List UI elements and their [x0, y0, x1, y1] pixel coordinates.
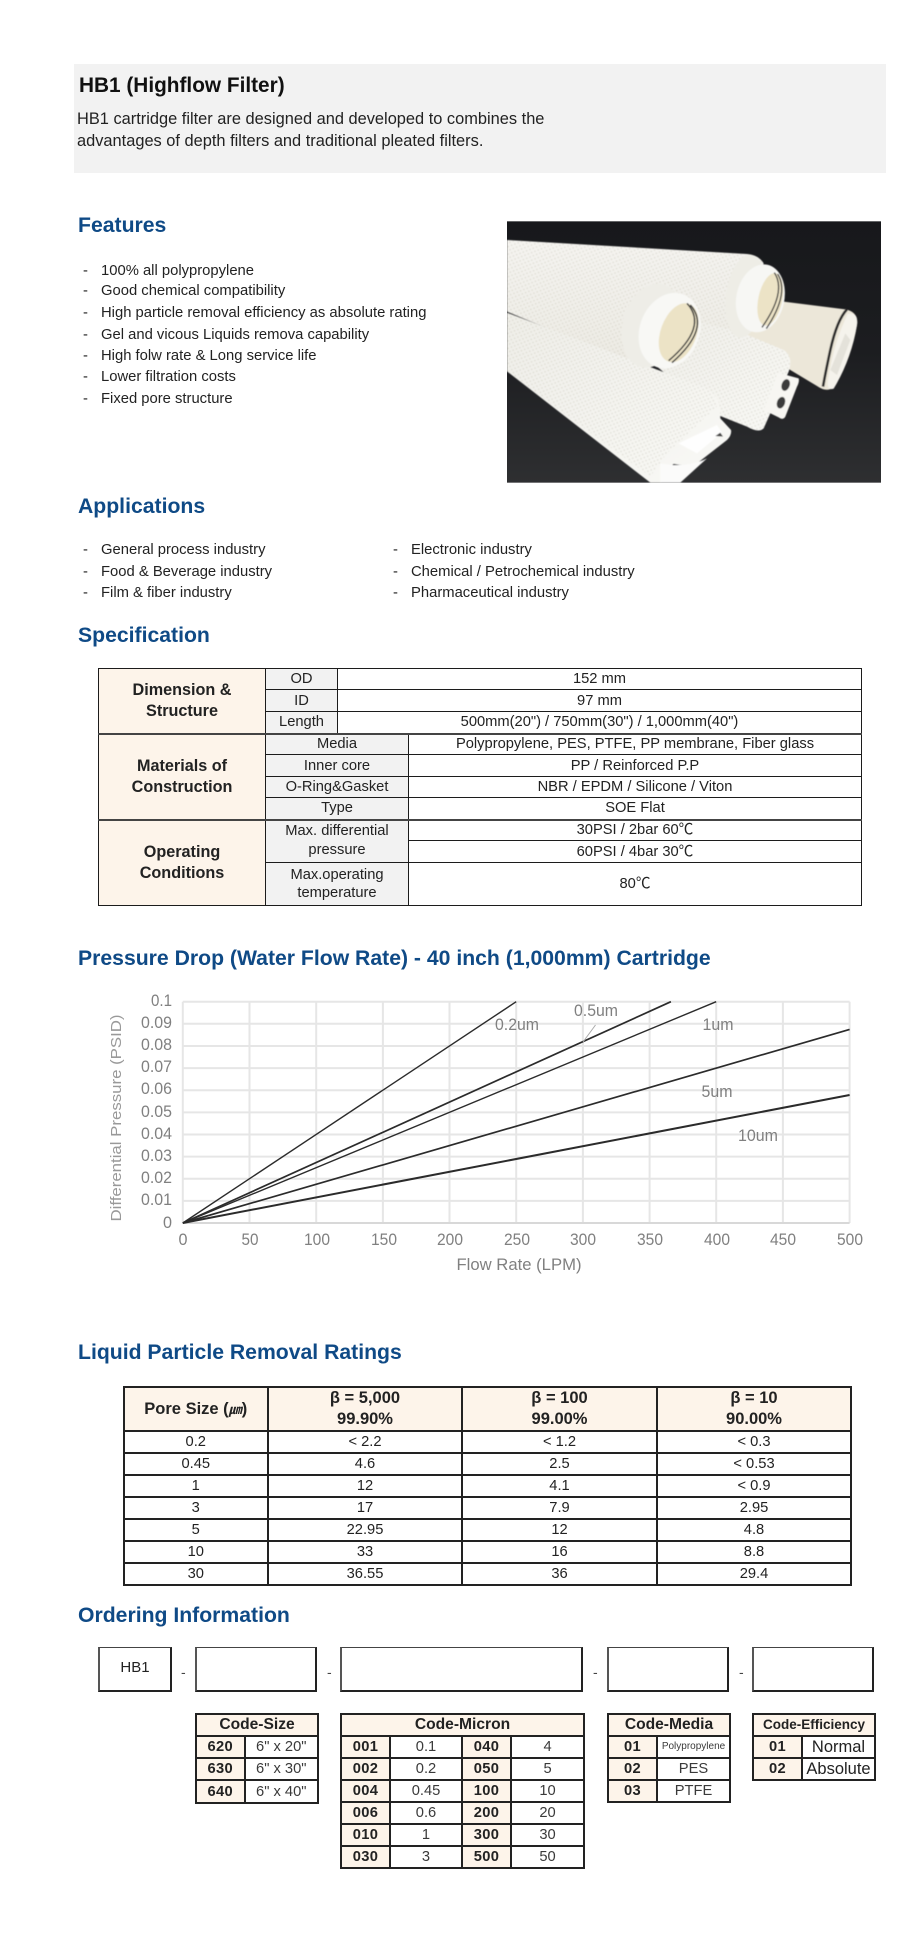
- applications list: Pharmaceutical industry: [411, 585, 569, 601]
- particle removal ratings table: 3: [192, 1500, 200, 1516]
- features list: -: [83, 263, 88, 279]
- order code: media box: [607, 1647, 729, 1692]
- table: Code-Media: 03: [624, 1783, 641, 1799]
- table: Code-Media: [607, 1713, 731, 1803]
- specification table: 152 mm: [573, 671, 626, 687]
- table: Code-Size: Code-Size: [219, 1716, 295, 1733]
- table: Code-Micron: 1: [422, 1827, 430, 1843]
- table: Code-Efficiency: Normal: [812, 1738, 865, 1756]
- table: Code-Micron: 006: [353, 1805, 378, 1821]
- table: Code-Micron: 30: [539, 1827, 556, 1843]
- separator: -: [739, 1664, 744, 1680]
- x axis tick labels: 500: [837, 1230, 863, 1249]
- series lines: [183, 1002, 850, 1223]
- specification table: ID: [294, 692, 309, 708]
- table: Code-Efficiency: Code-Efficiency: [763, 1717, 865, 1732]
- order code: size box: [195, 1647, 317, 1692]
- table: Code-Efficiency: Absolute: [806, 1760, 871, 1778]
- applications list: -: [393, 585, 398, 601]
- applications list: -: [83, 542, 88, 558]
- specification table: Construction: [132, 778, 232, 796]
- table: Code-Micron: 004: [353, 1783, 378, 1799]
- specification table: SOE Flat: [605, 800, 665, 816]
- heading: Liquid Particle Removal Ratings: Liquid Particle Removal Ratings: [78, 1341, 402, 1364]
- y axis tick labels: 0.03: [141, 1146, 172, 1165]
- applications list: -: [393, 564, 398, 580]
- applications list: Food & Beverage industry: [101, 564, 272, 580]
- series labels: [495, 1001, 778, 1145]
- table: Code-Media: 01: [624, 1739, 641, 1755]
- series labels: 1um: [702, 1015, 734, 1034]
- specification table: Materials of: [137, 756, 227, 774]
- x axis tick labels: 200: [437, 1230, 463, 1249]
- particle removal ratings table: 0.45: [181, 1456, 210, 1472]
- table: Code-Micron: 200: [474, 1805, 499, 1821]
- specification table: 97 mm: [577, 692, 622, 708]
- table: Code-Size: 6" x 40": [256, 1784, 306, 1800]
- particle removal ratings table: < 0.9: [737, 1478, 771, 1494]
- particle removal ratings table: 2.5: [549, 1456, 570, 1472]
- x axis tick labels: 150: [371, 1230, 397, 1249]
- y axis tick labels: 0.04: [141, 1124, 172, 1143]
- particle removal ratings table: 16: [551, 1544, 568, 1560]
- separator: -: [593, 1664, 598, 1680]
- x axis tick labels: 0: [178, 1230, 188, 1249]
- table: Code-Media: PES: [679, 1761, 708, 1777]
- order code: HB1 box: [98, 1647, 172, 1692]
- particle removal ratings table: 36.55: [347, 1566, 383, 1582]
- specification table: Conditions: [140, 864, 224, 882]
- features list: -: [83, 348, 88, 364]
- x axis tick labels: 50: [242, 1230, 258, 1249]
- specification table: 80℃: [619, 876, 651, 892]
- specification table: temperature: [297, 885, 377, 901]
- heading: Ordering Information: Ordering Information: [78, 1604, 290, 1627]
- front cartridge: [507, 313, 731, 483]
- separator: -: [327, 1664, 332, 1680]
- table: Code-Media: PTFE: [675, 1783, 712, 1799]
- particle removal ratings table: 8.8: [744, 1544, 764, 1560]
- table: Code-Micron: 040: [474, 1739, 499, 1755]
- particle removal ratings table: β = 5,000: [330, 1389, 400, 1407]
- features list: High folw rate & Long service life: [101, 348, 316, 364]
- features list: High particle removal efficiency as absolute rating: [101, 305, 426, 321]
- table: Code-Micron: 4: [543, 1739, 552, 1755]
- table: Code-Efficiency: [752, 1713, 876, 1781]
- x axis tick labels: 300: [570, 1230, 596, 1249]
- features list: -: [83, 327, 88, 343]
- particle removal ratings table: β = 10: [730, 1389, 778, 1407]
- y axis tick labels: 0.1: [151, 991, 172, 1010]
- y axis tick labels: 0.02: [141, 1168, 172, 1187]
- features list: Fixed pore structure: [101, 391, 233, 407]
- table: Code-Micron: 20: [539, 1805, 556, 1821]
- title: HB1 (Highflow Filter): [79, 74, 285, 97]
- particle removal ratings table: 29.4: [740, 1566, 768, 1582]
- table: Code-Size: 640: [208, 1784, 233, 1800]
- applications list: [83, 542, 635, 601]
- y axis tick labels: 0.07: [141, 1057, 172, 1076]
- table: Code-Micron: 3: [422, 1849, 430, 1865]
- separator: -: [181, 1664, 186, 1680]
- table: Code-Micron: 10: [539, 1783, 556, 1799]
- particle removal ratings table: Pore Size (㎛): [144, 1400, 247, 1418]
- table: Code-Micron: 0.45: [412, 1783, 440, 1799]
- x axis tick labels: [178, 1230, 863, 1249]
- series labels: 0.2um: [495, 1015, 539, 1034]
- table: Code-Size: [195, 1713, 319, 1804]
- specification table: Max.operating: [290, 867, 384, 883]
- specification table: Length: [279, 714, 324, 730]
- specification table: Structure: [146, 702, 218, 720]
- front ring: [612, 277, 691, 374]
- particle removal ratings table: 90.00%: [726, 1410, 782, 1428]
- intro text: HB1 cartridge filter are designed and developed to combines the: [77, 110, 544, 128]
- y axis tick labels: 0.09: [141, 1013, 172, 1032]
- applications list: -: [83, 585, 88, 601]
- particle removal ratings table: < 0.53: [733, 1456, 775, 1472]
- specification table: Type: [321, 800, 353, 816]
- table: Code-Efficiency: 01: [769, 1739, 786, 1755]
- table: Code-Micron: 0.2: [416, 1761, 436, 1777]
- table: Code-Size: 620: [208, 1739, 233, 1755]
- heading: Applications: Applications: [78, 495, 205, 518]
- features list: -: [83, 391, 88, 407]
- order code: efficiency box: [752, 1647, 874, 1692]
- features list: Good chemical compatibility: [101, 283, 285, 299]
- specification table: 30PSI / 2bar 60℃: [577, 822, 693, 838]
- applications list: Chemical / Petrochemical industry: [411, 564, 635, 580]
- x axis tick labels: 100: [304, 1230, 330, 1249]
- particle removal ratings table: 12: [551, 1522, 568, 1538]
- heading: Pressure Drop: Pressure Drop (Water Flow Rate) - 40 inch (1,000mm) Cartridge: [78, 947, 711, 970]
- particle removal ratings table: [123, 1386, 852, 1586]
- particle removal ratings table: 4.6: [355, 1456, 375, 1472]
- particle removal ratings table: < 2.2: [348, 1434, 382, 1450]
- table: Code-Micron: 5: [543, 1761, 552, 1777]
- specification table: OD: [290, 671, 313, 687]
- specification table: pressure: [308, 842, 366, 858]
- applications list: Film & fiber industry: [101, 585, 232, 601]
- table: Code-Micron: 002: [353, 1761, 378, 1777]
- particle removal ratings table: 4.8: [744, 1522, 764, 1538]
- y axis tick labels: 0.05: [141, 1102, 172, 1121]
- intro text: [77, 110, 544, 150]
- particle removal ratings table: 5: [192, 1522, 200, 1538]
- particle removal ratings table: 99.00%: [532, 1410, 587, 1428]
- table: Code-Micron: 100: [474, 1783, 499, 1799]
- series labels: 5um: [702, 1082, 732, 1101]
- table: Code-Micron: 0.1: [416, 1739, 436, 1755]
- table: Code-Micron: 030: [353, 1849, 378, 1865]
- y axis tick labels: 0.01: [141, 1190, 172, 1209]
- particle removal ratings table: 2.95: [740, 1500, 768, 1516]
- features list: Lower filtration costs: [101, 369, 236, 385]
- header panel: [74, 64, 886, 173]
- table: Code-Micron: Code-Micron: [415, 1716, 510, 1733]
- table: Code-Micron: 300: [474, 1827, 499, 1843]
- table: Code-Micron: 0.6: [416, 1805, 436, 1821]
- particle removal ratings table: 7.9: [549, 1500, 570, 1516]
- table: Code-Micron: 50: [539, 1849, 556, 1865]
- series labels: 0.5um: [574, 1001, 618, 1020]
- applications list: Electronic industry: [411, 542, 532, 558]
- particle removal ratings table: 22.95: [347, 1522, 383, 1538]
- particle removal ratings table: < 1.2: [543, 1434, 576, 1450]
- features list: -: [83, 369, 88, 385]
- features list: [83, 263, 426, 407]
- x axis tick labels: 350: [637, 1230, 663, 1249]
- particle removal ratings table: 30: [188, 1566, 204, 1582]
- features list: -: [83, 305, 88, 321]
- particle removal ratings table: 99.90%: [337, 1410, 393, 1428]
- table: Code-Micron: 001: [353, 1739, 378, 1755]
- table: Code-Efficiency: 02: [769, 1761, 786, 1777]
- x axis tick labels: 400: [704, 1230, 730, 1249]
- specification table: Media: [317, 736, 357, 752]
- table: Code-Micron: [340, 1713, 585, 1869]
- y axis title: Differential Pressure (PSID): [108, 1014, 125, 1222]
- features list: Gel and vicous Liquids remova capability: [101, 327, 369, 343]
- particle removal ratings table: 33: [357, 1544, 373, 1560]
- top cartridges: [507, 240, 763, 367]
- specification table: Polypropylene, PES, PTFE, PP membrane, Fiber glass: [456, 736, 814, 752]
- middle cartridge: [657, 317, 790, 430]
- specification table: NBR / EPDM / Silicone / Viton: [538, 779, 732, 795]
- specification table: Operating: [144, 843, 220, 861]
- applications list: -: [393, 542, 398, 558]
- particle removal ratings table: 17: [357, 1500, 373, 1516]
- table: Code-Micron: 500: [474, 1849, 499, 1865]
- particle removal ratings table: 12: [357, 1478, 373, 1494]
- table: Code-Media: Code-Media: [625, 1716, 713, 1733]
- rear ring: [720, 252, 770, 340]
- applications list: -: [83, 564, 88, 580]
- x axis tick labels: 450: [770, 1230, 796, 1249]
- applications list: General process industry: [101, 542, 266, 558]
- particle removal ratings table: β = 100: [531, 1389, 588, 1407]
- heading: Specification: Specification: [78, 624, 210, 647]
- features list: 100% all polypropylene: [101, 263, 254, 279]
- specification table: O-Ring&Gasket: [286, 779, 388, 795]
- y axis tick labels: 0.06: [141, 1079, 172, 1098]
- table: Code-Media: Polypropylene: [662, 1741, 725, 1752]
- particle removal ratings table: 1: [192, 1478, 200, 1494]
- features list: -: [83, 283, 88, 299]
- specification table: PP / Reinforced P.P: [571, 758, 699, 774]
- particle removal ratings table: < 0.3: [737, 1434, 771, 1450]
- table: Code-Size: 6" x 20": [256, 1739, 306, 1755]
- specification table: Inner core: [304, 758, 370, 774]
- photo: filter cartridges: [507, 221, 881, 483]
- particle removal ratings table: 0.2: [186, 1434, 206, 1450]
- line chart: pressure drop vs flow rate: [108, 991, 863, 1274]
- order code: HB1 box: HB1: [120, 1659, 150, 1676]
- specification table: 60PSI / 4bar 30℃: [577, 844, 693, 860]
- y axis tick labels: 0.08: [141, 1035, 172, 1054]
- series labels: 10um: [738, 1126, 778, 1145]
- particle removal ratings table: 36: [551, 1566, 568, 1582]
- specification table: Dimension &: [133, 681, 231, 699]
- table: Code-Size: 630: [208, 1761, 233, 1777]
- specification table: Max. differential: [285, 823, 389, 839]
- specification table: [98, 668, 862, 906]
- particle removal ratings table: 4.1: [549, 1478, 570, 1494]
- heading: Features: Features: [78, 214, 166, 237]
- table: Code-Size: 6" x 30": [256, 1761, 306, 1777]
- x axis title: Flow Rate (LPM): [456, 1255, 582, 1274]
- x axis tick labels: 250: [504, 1230, 530, 1249]
- y axis tick labels: 0: [163, 1213, 172, 1232]
- specification table: 500mm(20") / 750mm(30") / 1,000mm(40"): [461, 714, 738, 730]
- y axis tick labels: [141, 991, 172, 1232]
- particle removal ratings table: 10: [188, 1544, 204, 1560]
- intro text: advantages of depth filters and traditional pleated filters.: [77, 132, 483, 150]
- table: Code-Micron: 050: [474, 1761, 499, 1777]
- table: Code-Micron: 010: [353, 1827, 378, 1843]
- table: Code-Media: 02: [624, 1761, 641, 1777]
- order code: micron box: [340, 1647, 583, 1692]
- cream cartridge: [743, 302, 857, 390]
